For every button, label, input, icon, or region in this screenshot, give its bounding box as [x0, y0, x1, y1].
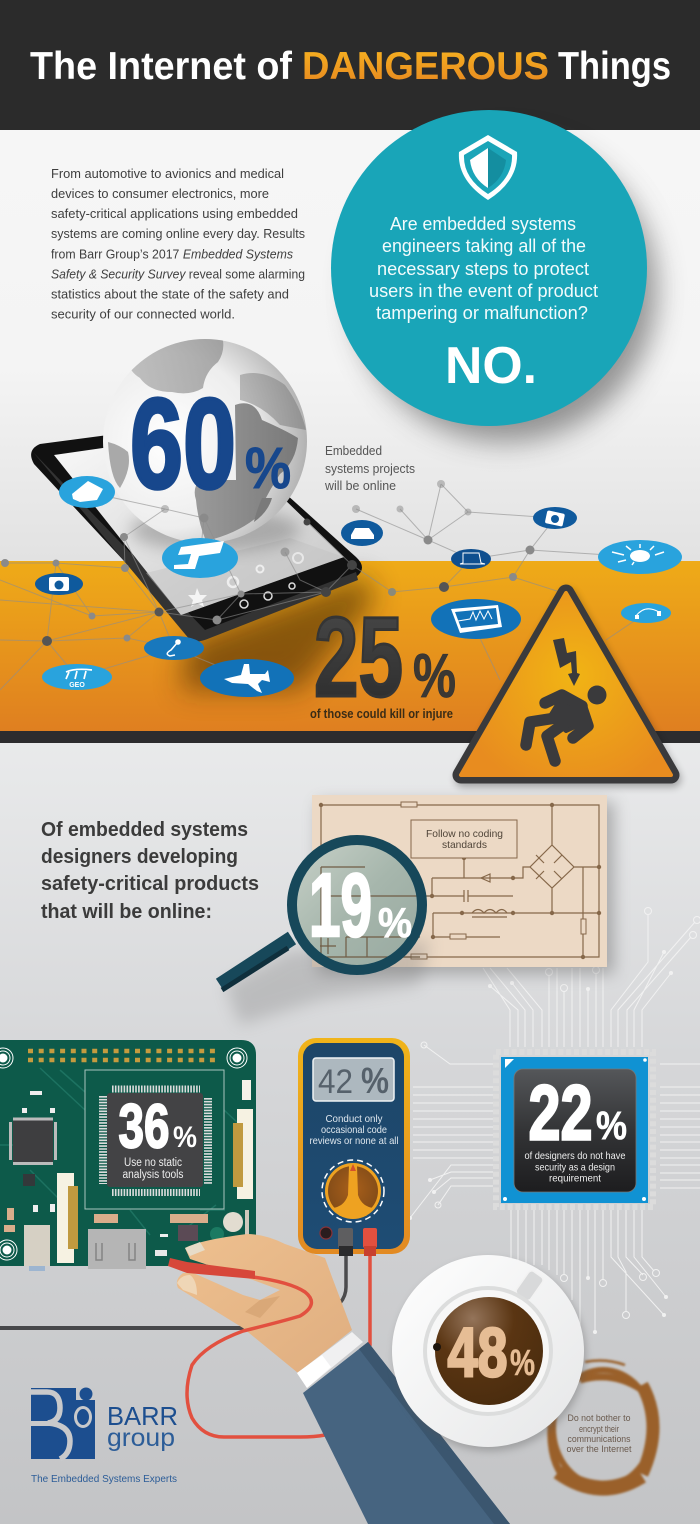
test probe — [168, 1258, 255, 1279]
icon: shield — [459, 135, 517, 200]
36 percent statistic: Use no static — [124, 1157, 182, 1169]
Barr Group logo — [31, 1388, 178, 1485]
label box: follow no coding standards: Follow no coding — [426, 828, 503, 840]
22 percent caption: of designers do not have — [524, 1150, 626, 1162]
label box: follow no coding standards: standards — [442, 839, 487, 851]
shadow of teal circle — [353, 138, 657, 442]
22 percent caption — [524, 1150, 626, 1184]
intro text block: security of our connected world. — [51, 306, 235, 322]
meter display: 42 — [318, 1063, 353, 1101]
intro text block: From automotive to avionics and medical — [51, 166, 284, 181]
pin header — [28, 1051, 216, 1060]
background: upper section — [0, 130, 700, 561]
icon: washing machine left — [35, 573, 83, 595]
coffee stain caption: encrypt their — [579, 1424, 619, 1435]
network nodes — [1, 480, 534, 646]
red probe wire loop — [187, 1277, 325, 1437]
25 percent statistic: % — [413, 642, 456, 711]
intro text block: safety-critical applications using embedded — [51, 206, 298, 221]
icon: laptop — [451, 549, 491, 569]
intro text block: Safety & Security Survey reveal some alarming — [51, 266, 305, 282]
60 percent statistic: 60 — [130, 373, 236, 516]
48 percent statistic: % — [510, 1342, 535, 1383]
network connection lines — [0, 484, 646, 690]
schematic panel shadow — [318, 802, 614, 974]
36 percent statistic: analysis tools — [122, 1169, 184, 1181]
60 percent caption: Embedded — [325, 444, 382, 458]
icon: sun — [598, 540, 682, 574]
icon: headset — [621, 603, 671, 623]
19 percent statistic: 19 — [309, 856, 372, 956]
question text: Are embedded systems — [390, 213, 576, 234]
meter display: % — [361, 1060, 389, 1101]
icon: house — [59, 476, 115, 508]
22 percent caption: security as a design — [535, 1162, 615, 1174]
section heading: that will be online: — [41, 901, 212, 923]
intro text block: devices to consumer electronics, more — [51, 186, 269, 201]
coffee cup — [392, 1255, 584, 1447]
60 percent statistic: % — [245, 436, 291, 501]
question text: engineers taking all of the — [382, 235, 586, 256]
60 percent caption: systems projects — [325, 462, 415, 476]
36 percent statistic: % — [173, 1121, 197, 1154]
meter display — [313, 1058, 394, 1101]
magnifying glass — [220, 840, 430, 990]
icon: lightning bolt — [553, 638, 580, 686]
coffee stain caption: Do not bother to — [568, 1413, 630, 1424]
title banner: DANGEROUS — [302, 45, 549, 88]
section heading: safety-critical products — [41, 873, 259, 895]
section heading — [41, 819, 259, 923]
suit sleeve — [303, 1342, 510, 1524]
hand — [177, 1234, 352, 1373]
orange band — [0, 561, 700, 731]
Barr Group logo: BARR — [107, 1401, 178, 1431]
icon: washing machine right — [533, 507, 577, 529]
Barr Group logo: The Embedded Systems Experts — [31, 1473, 177, 1485]
intro text block: statistics about the state of the safety and — [51, 286, 289, 302]
coffee stain caption: over the Internet — [566, 1444, 632, 1455]
multimeter — [298, 1038, 410, 1256]
small chip — [9, 1118, 57, 1165]
icon: geo signal: GEO — [69, 682, 85, 689]
warning sign — [461, 593, 673, 779]
title banner — [0, 0, 700, 130]
circuit board — [0, 1040, 256, 1271]
22 percent caption: requirement — [549, 1172, 601, 1184]
meter caption: occasional code — [321, 1125, 387, 1136]
answer: NO.: NO. — [445, 337, 537, 395]
question text: necessary steps to protect — [377, 258, 589, 279]
meter ports and probes — [320, 1227, 377, 1256]
logo mark — [31, 1388, 95, 1459]
board components — [4, 1080, 253, 1271]
section heading: Of embedded systems — [41, 819, 248, 841]
PCB traces around chip — [408, 908, 700, 1334]
60 percent caption: will be online — [324, 479, 396, 493]
globe shadow on tablet — [130, 508, 300, 552]
multimeter wires — [340, 1255, 370, 1345]
question text: tampering or malfunction? — [376, 302, 588, 323]
label box: follow no coding standards — [411, 820, 517, 858]
36 percent statistic: 36 — [118, 1092, 170, 1162]
question text — [369, 213, 598, 323]
icon: security camera — [162, 538, 238, 578]
meter caption — [310, 1114, 398, 1147]
shadow of tablet — [180, 575, 375, 690]
Barr Group logo: group — [107, 1424, 175, 1452]
48 percent statistic: 48 — [448, 1314, 508, 1392]
processor chip — [496, 1052, 653, 1207]
icon: microphone — [144, 636, 204, 660]
meter dial — [322, 1160, 384, 1222]
central chip outline — [85, 1070, 224, 1209]
teal question circle — [331, 110, 647, 426]
title banner: Things — [558, 45, 671, 88]
section heading: designers developing — [41, 846, 238, 868]
saucer shadow — [394, 1259, 586, 1451]
22 percent statistic: % — [596, 1104, 627, 1148]
icon: geo signal — [42, 664, 112, 690]
25 percent caption: of those could kill or injure — [310, 707, 453, 721]
36 percent statistic — [118, 1092, 197, 1181]
dark divider band — [0, 731, 700, 743]
intro text block: from Barr Group’s 2017 Embedded Systems — [51, 246, 293, 262]
meter caption: Conduct only — [326, 1114, 383, 1125]
magnifying glass shadow — [225, 940, 430, 1025]
intro text block: systems are coming online every day. Results — [51, 226, 305, 241]
icon: falling person — [526, 686, 606, 761]
central chip — [103, 1089, 208, 1192]
meter caption: reviews or none at all — [310, 1136, 398, 1147]
coffee stain — [551, 1361, 653, 1488]
25 percent statistic: 25 — [314, 594, 403, 720]
title banner: The Internet of — [30, 45, 293, 88]
question text: users in the event of product — [369, 280, 598, 301]
icon: airplane — [200, 659, 294, 697]
tablet — [31, 422, 362, 642]
schematic panel — [312, 795, 607, 967]
dark desk line — [0, 1326, 244, 1330]
icon: car — [341, 520, 383, 546]
icon: patient monitor — [431, 599, 521, 639]
globe — [103, 336, 307, 543]
19 percent statistic: % — [378, 899, 412, 946]
mounting holes — [0, 1048, 247, 1260]
intro text block — [51, 166, 305, 322]
coffee stain caption — [566, 1413, 632, 1455]
60 percent caption — [324, 444, 415, 493]
22 percent statistic: 22 — [528, 1068, 592, 1156]
shirt cuff — [297, 1332, 363, 1388]
coffee stain caption: communications — [568, 1434, 631, 1445]
background: lower section — [0, 742, 700, 1524]
